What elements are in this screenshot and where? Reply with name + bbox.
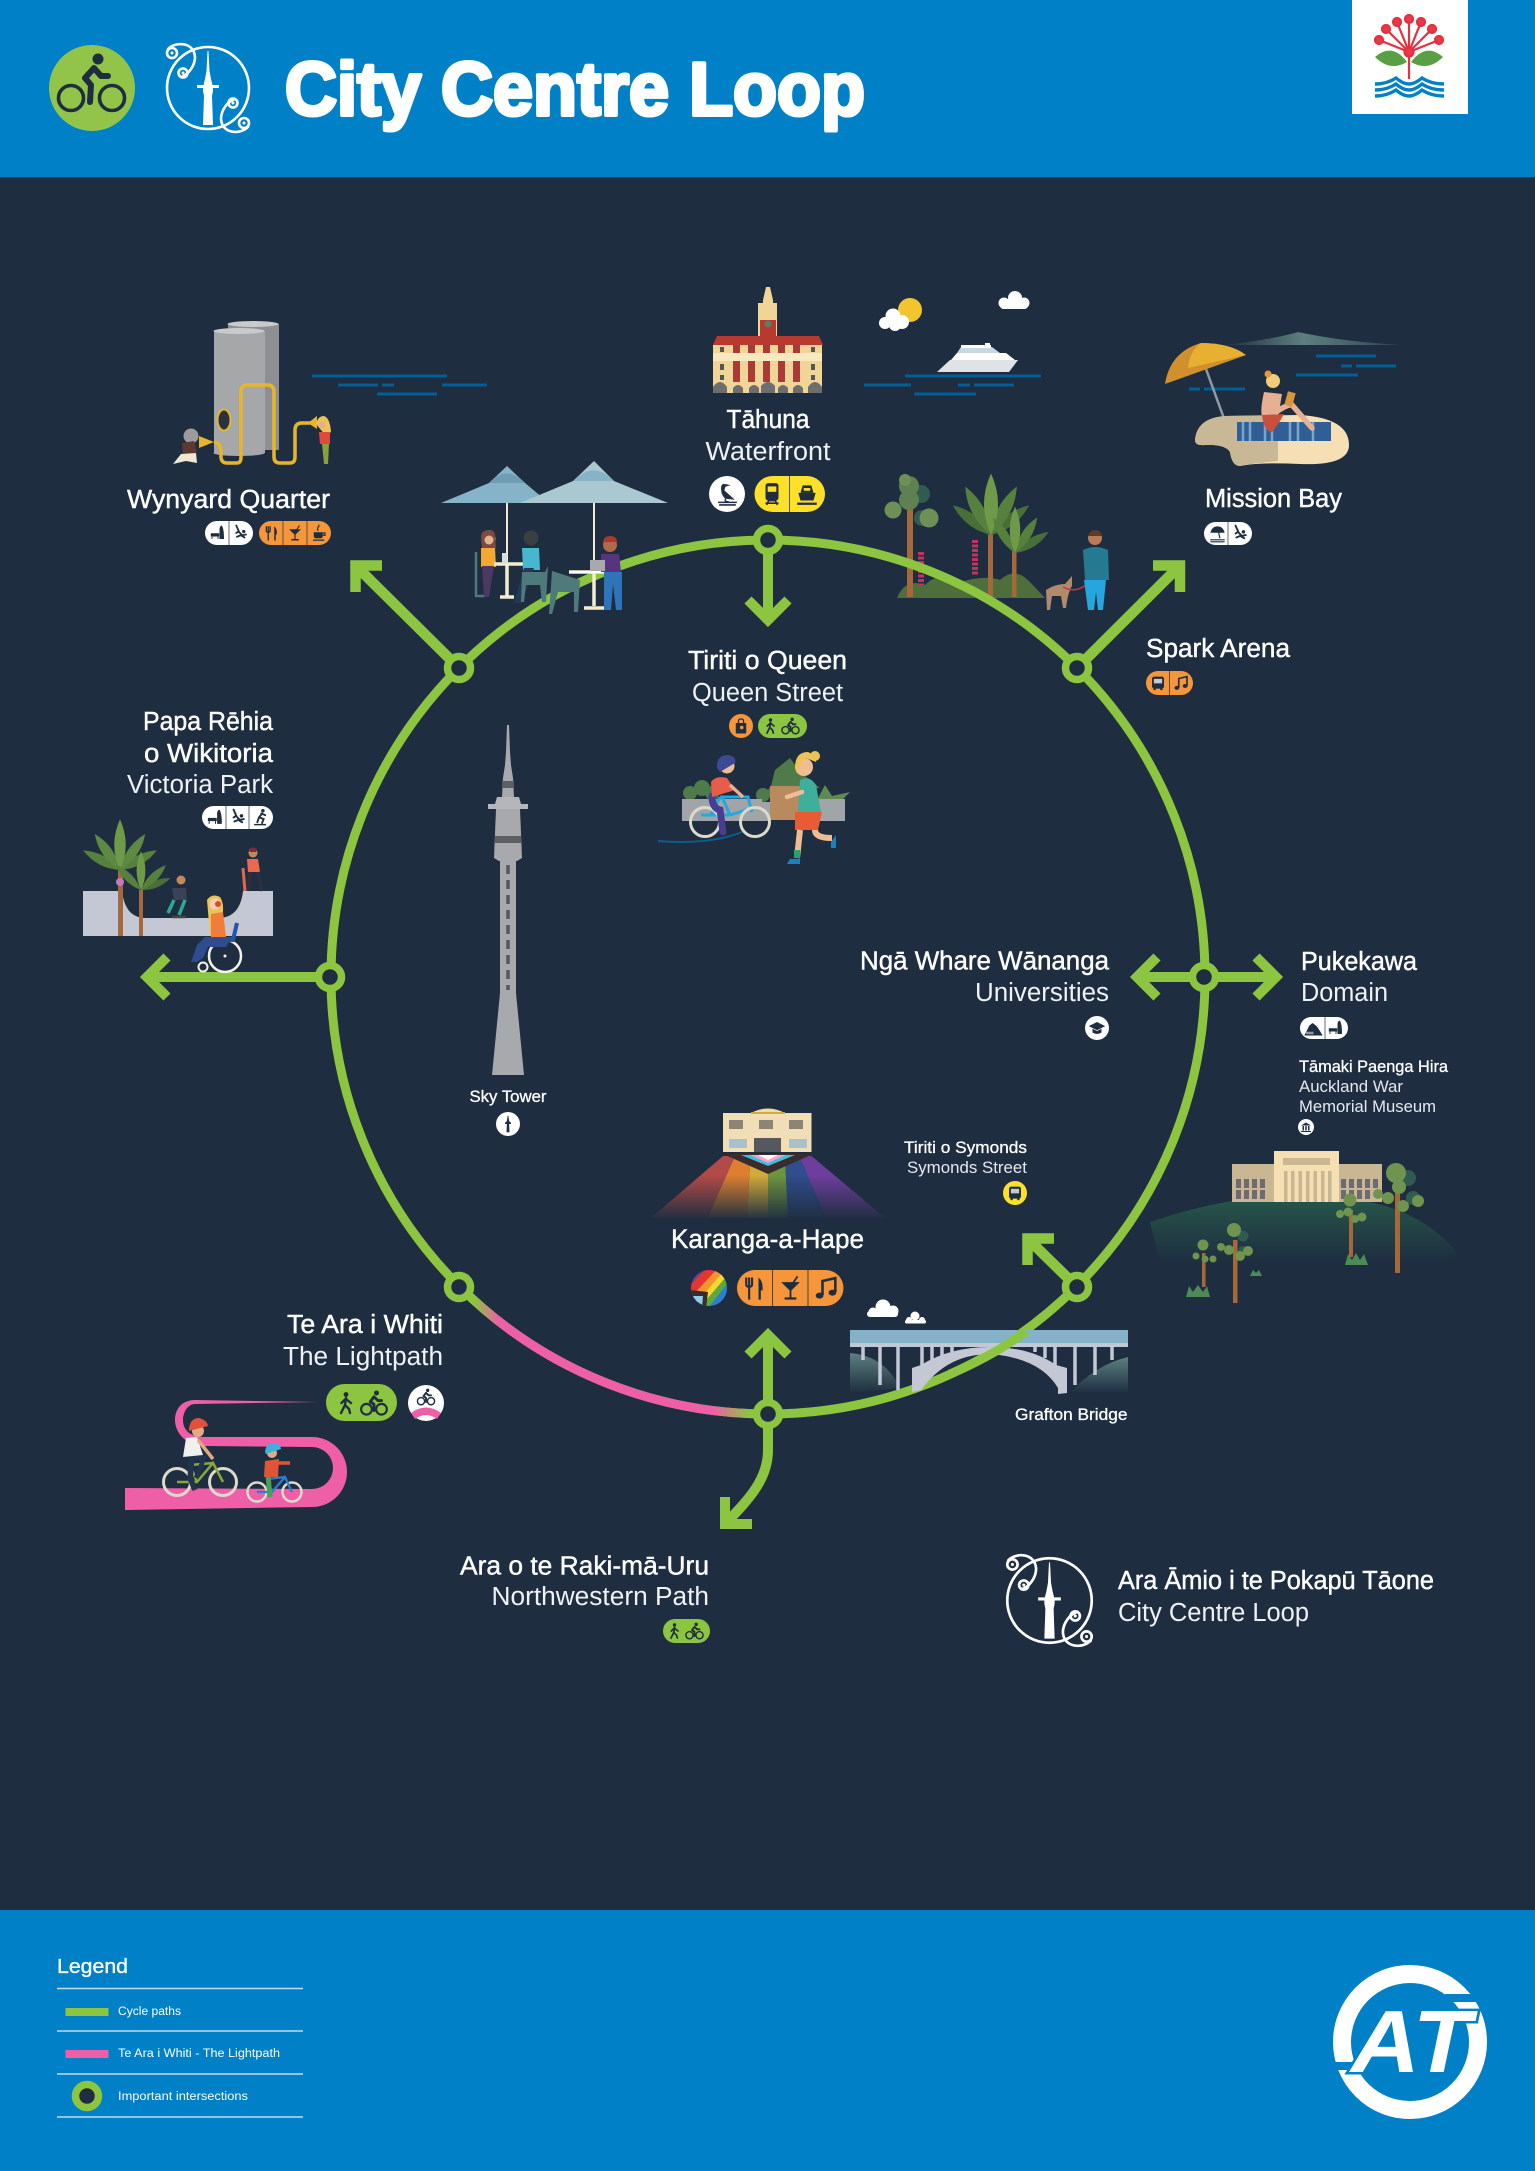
label: Ara Āmio i te Pokapū Tāone, City Centre Loop: Ara Āmio i te Pokapū Tāone <box>1118 1567 1434 1595</box>
illustration: clouds over bridge <box>867 1300 926 1324</box>
label: Auckland War Memorial Museum <box>1299 1057 1449 1116</box>
arrow: to Northwestern Path <box>725 1414 768 1524</box>
logo: Auckland Transport <box>1326 1974 1495 2110</box>
label: Papa Rēhia o Wikitoria, Victoria Park: Papa Rēhia <box>143 708 274 736</box>
label: Te Ara i Whiti, The Lightpath <box>283 1311 443 1371</box>
icons: Victoria Park <box>202 806 273 829</box>
illustration: Karanga-a-Hape building <box>723 1108 812 1152</box>
illustration: cruise ship <box>937 344 1018 372</box>
illustration: Domain hill and museum <box>1150 1151 1456 1303</box>
arrow: to Mission Bay <box>1077 566 1180 668</box>
illustration: skate ramp at Victoria Park <box>81 819 273 972</box>
icon: koru Sky Tower logo <box>167 44 249 132</box>
water lines: Wynyard <box>312 376 487 394</box>
illustration: Wynyard silos and listening horns <box>173 321 331 464</box>
header band <box>0 0 1535 177</box>
label: Papa Rēhia o Wikitoria, Victoria Park <box>127 708 274 799</box>
illustration: cafe umbrellas and diners <box>441 461 668 614</box>
label: Papa Rēhia o Wikitoria, Victoria Park: Victoria Park <box>127 771 273 799</box>
icon: cycling badge <box>49 45 135 131</box>
illustration: Tāhuna ferry building <box>713 287 823 393</box>
label: Ara o te Raki-mā-Uru, Northwestern Path: Ara o te Raki-mā-Uru <box>460 1552 709 1580</box>
logo: City Centre Loop koru <box>1007 1555 1092 1646</box>
illustration: native plants, man and dog <box>884 473 1109 610</box>
icons: Mission Bay <box>1204 522 1252 545</box>
label: Auckland War Memorial Museum: Memorial Museum <box>1299 1097 1436 1116</box>
label: Symonds Street: Symonds Street <box>907 1158 1027 1177</box>
arrow: to Wynyard Quarter <box>356 566 459 668</box>
arrow: to Universities and Domain <box>1137 957 1276 997</box>
illustration: rainbow crossing <box>645 1154 890 1220</box>
illustration: beach reader at Mission Bay <box>1165 332 1402 466</box>
label: Ngā Whare Wānanga, Universities <box>860 948 1110 1007</box>
label: Tāhuna Waterfront: Waterfront <box>706 438 830 466</box>
arrow: to Symonds Street <box>1028 1238 1077 1287</box>
label: Mission Bay: Mission Bay <box>1205 485 1342 513</box>
label: Sky Tower: Sky Tower <box>470 1087 547 1106</box>
logo: Auckland Council pohutukawa <box>1352 0 1468 114</box>
label: Spark Arena: Spark Arena <box>1146 635 1291 663</box>
intersection nodes <box>318 528 1216 1426</box>
label: Wynyard Quarter: Wynyard Quarter <box>127 486 331 514</box>
icon: progress pride badge <box>691 1270 727 1306</box>
label: Auckland War Memorial Museum: Auckland War <box>1299 1077 1403 1096</box>
ring segment crossing under the bridge deck <box>950 1331 1026 1374</box>
label: Te Ara i Whiti, The Lightpath: Te Ara i Whiti <box>287 1311 443 1339</box>
label: Ara o te Raki-mā-Uru, Northwestern Path: Northwestern Path <box>492 1583 709 1611</box>
label: Ngā Whare Wānanga, Universities: Universities <box>975 979 1109 1007</box>
label: Pukekawa Domain: Pukekawa <box>1301 948 1418 976</box>
label: Te Ara i Whiti, The Lightpath: The Lightpath <box>283 1343 443 1371</box>
arrow: to Karangahape <box>748 1335 788 1414</box>
illustration: Queen Street cyclist and runner <box>658 751 850 864</box>
title: City Centre Loop <box>285 47 865 131</box>
legend: Legend <box>57 1956 128 1978</box>
icons: Domain <box>1300 1017 1348 1039</box>
label: Tiriti o Queen, Queen Street: Tiriti o Queen <box>688 647 847 675</box>
label: Symonds Street: Tiriti o Symonds <box>904 1138 1027 1157</box>
illustration: sun and clouds <box>879 291 1030 331</box>
label: Symonds Street <box>904 1138 1027 1177</box>
icons: The Lightpath <box>326 1384 444 1421</box>
label: Auckland War Memorial Museum: Tāmaki Paenga Hira <box>1299 1057 1449 1076</box>
illustration: Sky Tower <box>488 725 528 1075</box>
label: Ara Āmio i te Pokapū Tāone, City Centre Loop: City Centre Loop <box>1118 1599 1309 1627</box>
legend: Important intersections <box>118 2091 248 2103</box>
label: Karanga-a-Hape: Karanga-a-Hape <box>671 1224 864 1254</box>
logo: Auckland Transport: AT <box>1349 1992 1478 2091</box>
arrow: to Queen Street <box>748 540 788 620</box>
legend <box>57 1956 303 2117</box>
icons: Karanga-a-Hape <box>737 1270 844 1306</box>
legend: Cycle paths <box>118 2006 181 2018</box>
label: Tāhuna Waterfront <box>706 406 830 466</box>
label: Pukekawa Domain <box>1301 948 1418 1007</box>
illustration: Lightpath ribbon with cyclists <box>125 1400 347 1510</box>
label: Papa Rēhia o Wikitoria, Victoria Park: o Wikitoria <box>144 740 274 768</box>
label: Ara Āmio i te Pokapū Tāone, City Centre Loop <box>1118 1567 1434 1627</box>
label: Pukekawa Domain: Domain <box>1301 979 1388 1007</box>
icon: museum <box>1298 1119 1314 1135</box>
icon: bus <box>1003 1181 1027 1205</box>
loop ring: Lightpath section <box>459 1286 768 1414</box>
icon: Sky Tower <box>496 1112 520 1136</box>
label: Tiriti o Queen, Queen Street: Queen Street <box>692 679 843 707</box>
icon: Universities <box>1085 1016 1109 1040</box>
label: Tiriti o Queen, Queen Street <box>688 647 847 707</box>
arrow: to Victoria Park <box>147 957 330 997</box>
footer band <box>0 1910 1535 2171</box>
loop ring: cycle path <box>331 540 1205 1414</box>
illustration: Grafton Bridge <box>850 1330 1128 1394</box>
water lines: harbour <box>864 376 1041 394</box>
label: Tāhuna Waterfront: Tāhuna <box>726 406 810 434</box>
icons: Northwestern Path <box>663 1619 710 1643</box>
legend: Te Ara i Whiti - The Lightpath <box>118 2048 280 2060</box>
icons: Wynyard Quarter <box>205 521 331 545</box>
icons: Spark Arena <box>1146 671 1193 695</box>
icons: Waterfront <box>709 476 825 512</box>
label: Ara o te Raki-mā-Uru, Northwestern Path <box>460 1552 709 1611</box>
icons: Queen Street <box>729 714 807 738</box>
label: Ngā Whare Wānanga, Universities: Ngā Whare Wānanga <box>860 948 1110 976</box>
label: Grafton Bridge: Grafton Bridge <box>1015 1405 1128 1424</box>
